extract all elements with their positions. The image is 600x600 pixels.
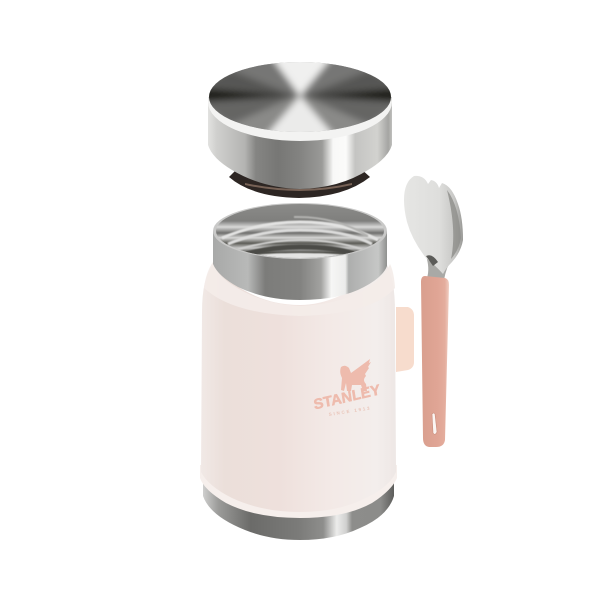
spork handle	[421, 276, 449, 447]
brand logo	[313, 359, 382, 417]
lid top bevel	[208, 63, 392, 141]
steel rim outside	[213, 231, 387, 300]
rim interior threads	[216, 204, 384, 258]
lid gasket	[229, 168, 370, 198]
jar body	[200, 200, 414, 540]
lid top brushed face	[209, 62, 391, 132]
handle slot	[432, 413, 437, 434]
spork	[404, 176, 463, 447]
icon: bear with wings	[340, 359, 371, 391]
jar lid	[208, 62, 392, 198]
collar	[204, 262, 395, 316]
base steel ring	[203, 470, 394, 540]
lower body band	[200, 465, 397, 518]
spork head	[404, 176, 463, 274]
rim top edge	[213, 203, 387, 259]
side clip for spork	[396, 307, 414, 372]
spork bowl shadow	[426, 255, 438, 266]
body shell	[201, 265, 396, 512]
spork neck	[426, 256, 452, 280]
wordmark: STANLEY	[313, 382, 382, 413]
tagline: SINCE 1913	[328, 405, 372, 417]
lid side wall	[208, 97, 392, 189]
product illustration	[200, 62, 463, 540]
